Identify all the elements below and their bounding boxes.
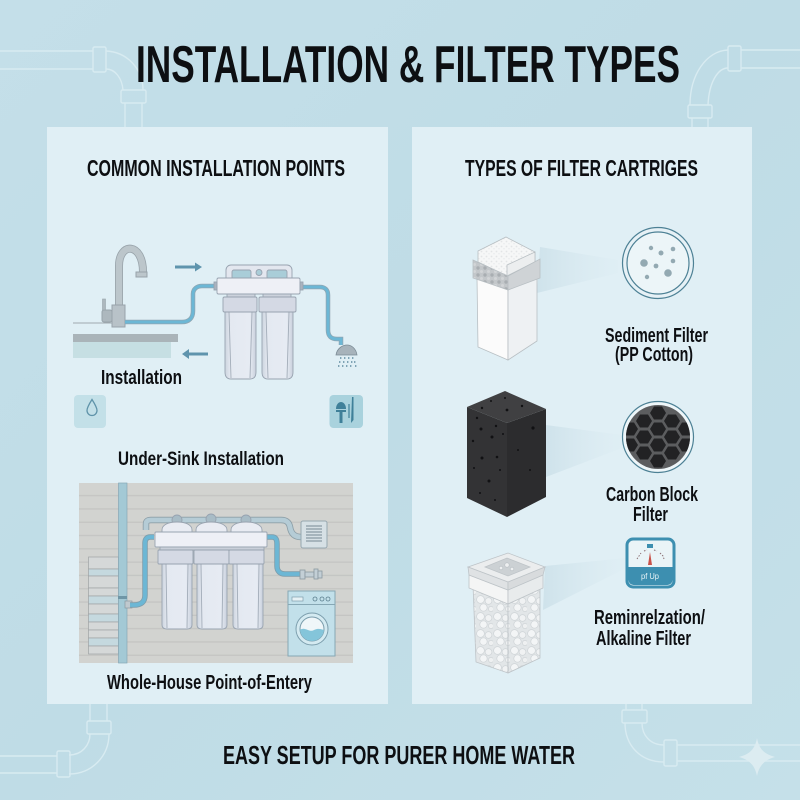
footer tagline: EASY SETUP FOR PURER HOME WATER bbox=[223, 740, 575, 770]
label: remineralization alkaline filter bbox=[594, 607, 705, 650]
vent slats bbox=[88, 557, 118, 654]
magnified view: sediment particles bbox=[622, 228, 694, 298]
panel: types of filter cartridges bbox=[412, 127, 752, 704]
control panel box bbox=[301, 521, 327, 548]
label: under-sink installation: Under-Sink Installation bbox=[118, 449, 284, 470]
label: remineralization alkaline filter: Reminrelzation/ bbox=[594, 607, 705, 629]
label: whole-house point-of-entry: Whole-House Point-of-Entery bbox=[107, 672, 313, 694]
cartridge: sediment bbox=[473, 237, 540, 360]
decorative sparkle bbox=[739, 738, 775, 776]
decorative pipe: top left bbox=[0, 47, 146, 127]
triple filter housing bbox=[155, 514, 267, 629]
water pipe: outlet bbox=[300, 287, 341, 345]
blue inlet and outlet pipes bbox=[130, 537, 300, 605]
arrow: flow left bbox=[182, 349, 208, 359]
magnified view: carbon honeycomb bbox=[622, 402, 694, 472]
panel: common installation points bbox=[47, 127, 388, 704]
decorative pipe: bottom right bbox=[622, 704, 800, 766]
icon: washing machine bbox=[288, 591, 335, 656]
label: installation: Installation bbox=[101, 367, 182, 389]
label: sediment filter: (PP Cotton) bbox=[615, 344, 693, 366]
magnifier beam bbox=[537, 247, 618, 293]
decorative pipe: bottom left bbox=[0, 704, 111, 777]
icon: tools tile bbox=[330, 395, 363, 428]
wall bbox=[79, 483, 353, 663]
icon: pH gauge bbox=[627, 539, 674, 587]
icon: water drop tile bbox=[74, 395, 106, 428]
icon: faucet bbox=[102, 249, 147, 327]
label: carbon block filter: Carbon Block bbox=[606, 484, 699, 506]
countertop bbox=[73, 323, 178, 358]
manifold pipe bbox=[146, 520, 301, 537]
magnifier beam bbox=[546, 425, 622, 477]
magnifier beam bbox=[543, 558, 626, 610]
label: sediment filter bbox=[605, 325, 708, 366]
remineralization filter row bbox=[468, 539, 705, 673]
icon: shower head bbox=[336, 345, 357, 367]
label: remineralization alkaline filter: Alkaline Filter bbox=[596, 628, 691, 650]
icon: pH gauge: pf Up bbox=[641, 572, 660, 581]
illustration: whole-house system bbox=[79, 483, 353, 663]
heading: types of filter cartridges: TYPES OF FILTER CARTRIGES bbox=[465, 155, 698, 181]
decorative pipe: top right bbox=[688, 46, 800, 127]
carbon block filter row bbox=[467, 391, 699, 526]
label: carbon block filter: Filter bbox=[633, 504, 668, 526]
cartridge: alkaline bbox=[468, 553, 545, 673]
outlet valve bbox=[300, 569, 322, 579]
cartridge: carbon block bbox=[467, 391, 546, 517]
vertical supply pipe bbox=[118, 483, 132, 663]
twin filter housing bbox=[214, 265, 303, 379]
label: sediment filter: Sediment Filter bbox=[605, 325, 708, 347]
water pipe: inlet bbox=[125, 286, 216, 322]
illustration: under-sink filter bbox=[73, 249, 357, 379]
heading: common installation points: COMMON INSTALLATION POINTS bbox=[87, 155, 345, 181]
arrow: flow right bbox=[175, 262, 202, 272]
label: carbon block filter bbox=[606, 484, 699, 526]
sediment filter row bbox=[473, 228, 708, 366]
